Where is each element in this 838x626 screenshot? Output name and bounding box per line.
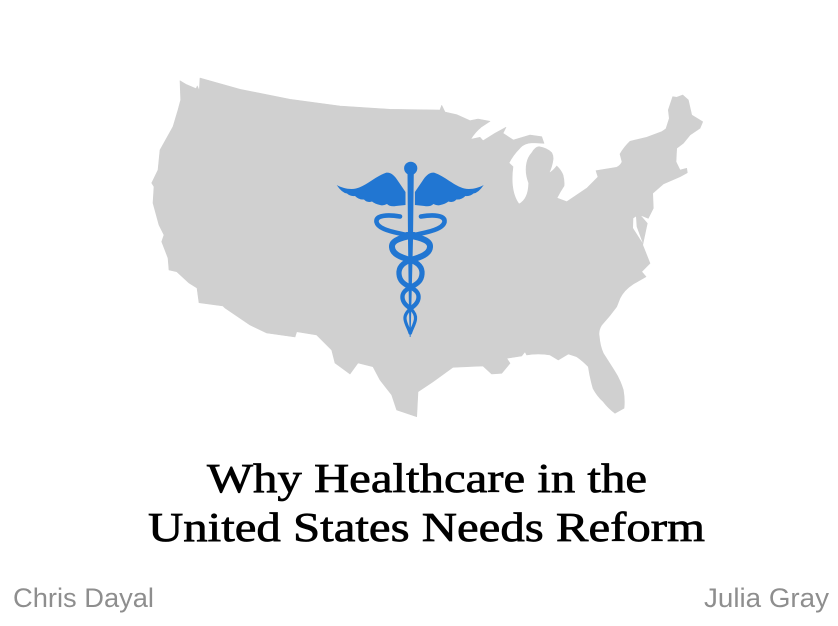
title line 2: United States Needs Reform (148, 504, 705, 550)
staff (408, 172, 414, 337)
right wing (415, 173, 484, 206)
snake: first serpent (376, 215, 430, 333)
author: Julia Gray: Julia Gray (704, 583, 830, 613)
staff knob (404, 162, 417, 175)
title (148, 455, 705, 550)
icon: caduceus (337, 162, 484, 337)
title line 1: Why Healthcare in the (207, 455, 647, 501)
map: United States silhouette (152, 78, 703, 417)
snake: second serpent (392, 215, 445, 333)
left wing (337, 173, 406, 206)
author: Chris Dayal: Chris Dayal (13, 583, 154, 613)
